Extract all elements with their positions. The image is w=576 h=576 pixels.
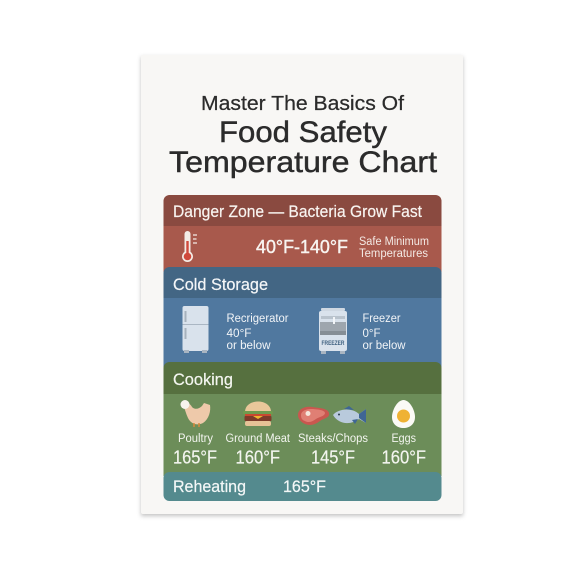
reheating label: Reheating (173, 478, 246, 496)
panel: cooking (164, 362, 442, 476)
icon: burger (243, 402, 273, 426)
label and temperature: steaks and chops: 145°F (311, 446, 355, 468)
icon: fish (333, 406, 366, 424)
reheating temperature: 165°F (283, 478, 326, 496)
icon: freezer: FREEZER (322, 341, 345, 347)
cooking heading: Cooking (173, 371, 233, 389)
refrigerator text (226, 313, 289, 352)
refrigerator text: 40°F (226, 328, 252, 340)
label and temperature: eggs: Eggs (392, 433, 416, 445)
label and temperature: eggs: 160°F (382, 446, 426, 468)
label and temperature: ground meat (226, 433, 291, 468)
title (169, 92, 438, 179)
safe minimum note: Temperatures (359, 248, 428, 260)
refrigerator text: Recrigerator (226, 313, 289, 325)
title: Temperature Chart (169, 146, 438, 179)
label and temperature: steaks and chops: Steaks/Chops (298, 433, 368, 445)
title: Master The Basics Of (201, 92, 404, 115)
title: Food Safety (219, 116, 387, 149)
label and temperature: poultry: Poultry (178, 433, 213, 445)
label and temperature: ground meat: 160°F (236, 446, 280, 468)
label and temperature: poultry: 165°F (173, 446, 217, 468)
refrigerator text: or below (226, 340, 271, 352)
icon: chicken (180, 400, 210, 427)
freezer text: 0°F (362, 328, 380, 340)
danger zone heading: Danger Zone — Bacteria Grow Fast (173, 203, 422, 221)
freezer text: Freezer (362, 313, 401, 325)
icon: freezer (319, 308, 347, 354)
safe minimum note: Safe Minimum (359, 236, 429, 248)
label and temperature: poultry (173, 433, 217, 468)
danger temperature range: 40°F-140°F (256, 236, 348, 257)
poster card (141, 55, 463, 516)
cold storage heading: Cold Storage (173, 276, 268, 294)
safe minimum note (359, 236, 429, 260)
label and temperature: eggs (382, 433, 426, 468)
label and temperature: ground meat: Ground Meat (226, 433, 291, 445)
icon: refrigerator (182, 306, 208, 353)
icon: thermometer (182, 231, 197, 262)
icon: egg (392, 400, 415, 428)
icon: steak (298, 407, 329, 425)
label and temperature: steaks and chops (298, 433, 368, 468)
panel: danger zone (164, 195, 442, 272)
panel: cold storage (164, 267, 442, 367)
panel: reheating (164, 472, 442, 501)
freezer text (362, 313, 406, 352)
freezer text: or below (362, 340, 406, 352)
